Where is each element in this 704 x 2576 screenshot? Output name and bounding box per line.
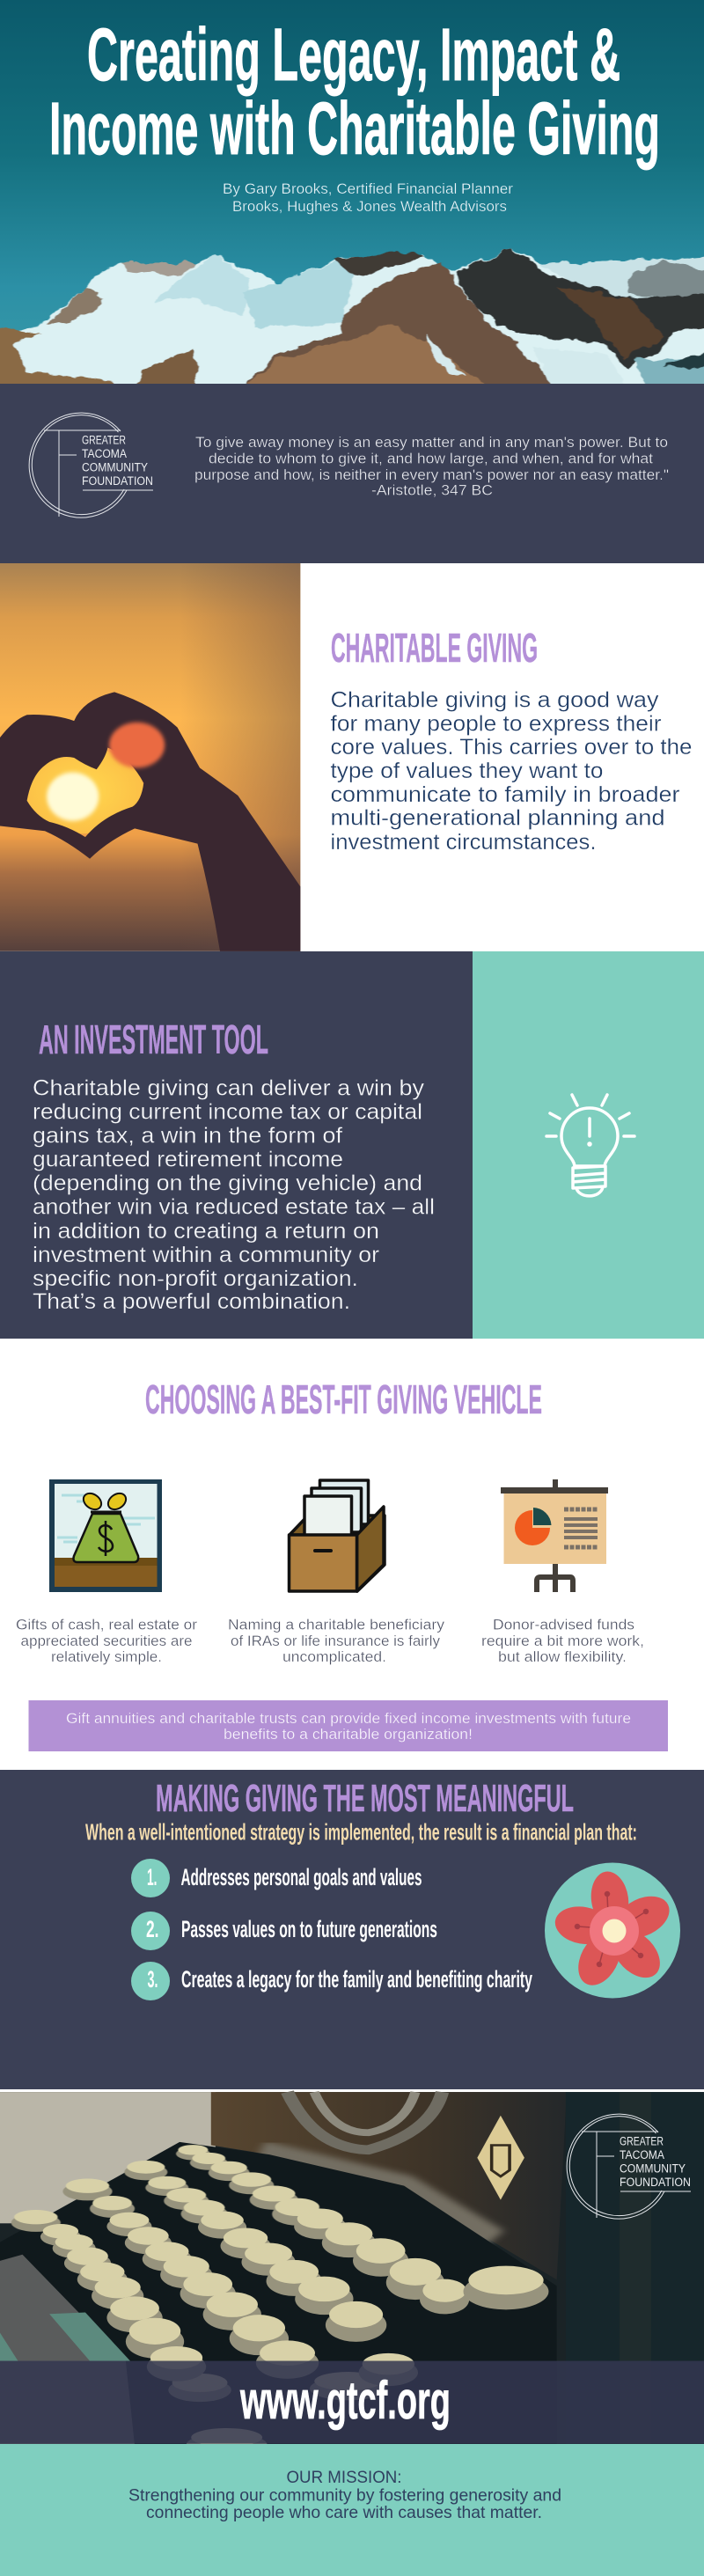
body text: (depending on the giving vehicle) and	[33, 1171, 422, 1195]
caption: donor-advised funds: Donor-advised funds	[493, 1616, 634, 1633]
body text: multi-generational planning and	[331, 806, 665, 831]
body text: Charitable giving can deliver a win by	[33, 1075, 425, 1100]
caption: beneficiary	[228, 1616, 445, 1665]
callout: gift annuities: benefits to a charitable organization!	[224, 1726, 473, 1743]
Aristotle quote: decide to whom to give it, and how large, and when, and for what	[209, 451, 653, 466]
byline	[223, 180, 513, 215]
caption: beneficiary: uncomplicated.	[282, 1648, 386, 1665]
list item 1: 1.	[147, 1864, 157, 1890]
panel: charitable giving	[0, 563, 704, 951]
logo: Greater Tacoma Community Foundation: FOUNDATION	[82, 474, 153, 488]
heading: AN INVESTMENT TOOL	[39, 1016, 268, 1062]
mission text: Strengthening our community by fostering generosity and	[128, 2485, 561, 2505]
list item 1: Addresses personal goals and values	[181, 1864, 422, 1890]
panel: quote band	[0, 384, 704, 563]
caption: gifts: appreciated securities are	[21, 1633, 192, 1649]
photo: heart hands at sunset	[0, 563, 300, 951]
mission text: OUR MISSION:	[287, 2468, 401, 2487]
body text: guaranteed retirement income	[33, 1148, 343, 1172]
byline: By Gary Brooks, Certified Financial Planner	[223, 180, 513, 197]
icon: presentation board	[501, 1479, 608, 1592]
logo: Greater Tacoma Community Foundation: FOUNDATION	[620, 2176, 691, 2189]
body text: specific non-profit organization.	[33, 1266, 358, 1291]
logo: Greater Tacoma Community Foundation: COMMUNITY	[620, 2161, 686, 2176]
caption: donor-advised funds	[481, 1616, 644, 1665]
body text: in addition to creating a return on	[33, 1219, 379, 1244]
divider line	[0, 2089, 704, 2092]
Aristotle quote: -Aristotle, 347 BC	[371, 482, 493, 498]
caption: donor-advised funds: but allow flexibility.	[498, 1648, 627, 1665]
caption: beneficiary: Naming a charitable beneficiary	[228, 1616, 445, 1633]
body text: reducing current income tax or capital	[33, 1100, 422, 1125]
Aristotle quote	[194, 434, 669, 498]
body text: another win via reduced estate tax – all	[33, 1195, 435, 1220]
list item 3: 3.	[148, 1966, 158, 1993]
Aristotle quote: To give away money is an easy matter and in any man's power. But to	[195, 434, 668, 451]
body text: investment circumstances.	[331, 830, 597, 855]
panel: choosing a best-fit giving vehicle	[0, 1339, 704, 1770]
panel: an investment tool	[0, 951, 704, 1339]
icon: light bulb	[546, 1095, 634, 1196]
logo: Greater Tacoma Community Foundation: GREATER	[82, 433, 126, 447]
list item 3	[131, 1962, 532, 2000]
panel: our mission footer	[0, 2444, 704, 2576]
body text: That’s a powerful combination.	[33, 1289, 350, 1314]
caption: beneficiary: of IRAs or life insurance is fairly	[231, 1633, 440, 1649]
body text	[33, 1075, 435, 1314]
logo: Greater Tacoma Community Foundation: TACOMA	[620, 2148, 664, 2161]
caption: gifts	[16, 1616, 197, 1665]
byline: Brooks, Hughes & Jones Wealth Advisors	[232, 198, 507, 215]
body text: Charitable giving is a good way	[331, 688, 659, 713]
body text: communicate to family in broader	[331, 782, 679, 807]
mountain range photo	[0, 248, 704, 395]
list item 2: 2.	[146, 1916, 158, 1942]
mission text	[128, 2468, 561, 2522]
icon: box of files	[289, 1480, 385, 1591]
caption: gifts: relatively simple.	[51, 1648, 162, 1665]
logo: Greater Tacoma Community Foundation	[29, 413, 153, 517]
body text: type of values they want to	[331, 759, 604, 783]
icon: money bag	[49, 1479, 162, 1592]
body text: core values. This carries over to the	[331, 735, 692, 760]
body text: gains tax, a win in the form of	[33, 1123, 342, 1148]
mission text: connecting people who care with causes that matter.	[146, 2503, 542, 2522]
list item 2: Passes values on to future generations	[181, 1916, 437, 1942]
Aristotle quote: purpose and how, is neither in every man's power nor an easy matter."	[194, 466, 669, 483]
title	[49, 13, 660, 170]
callout: gift annuities	[28, 1700, 668, 1751]
logo: Greater Tacoma Community Foundation	[567, 2114, 691, 2219]
photo: typewriter keys	[0, 2092, 704, 2456]
callout: gift annuities: Gift annuities and charitable trusts can provide fixed income investments with future	[66, 1710, 631, 1727]
body text	[331, 688, 692, 855]
logo: Greater Tacoma Community Foundation: GREATER	[620, 2135, 664, 2147]
website url: www.gtcf.org	[239, 2371, 451, 2430]
panel: header with mountain photo	[0, 0, 704, 395]
list item 1	[131, 1859, 422, 1897]
caption: donor-advised funds: require a bit more work,	[481, 1633, 644, 1649]
caption: gifts: Gifts of cash, real estate or	[16, 1616, 197, 1633]
body text: for many people to express their	[331, 711, 662, 736]
panel: making giving the most meaningful	[0, 1770, 704, 2089]
logo: Greater Tacoma Community Foundation: COMMUNITY	[82, 461, 148, 473]
logo: Greater Tacoma Community Foundation: TACOMA	[82, 447, 127, 460]
list item 2	[131, 1912, 437, 1950]
icon: flower	[545, 1862, 680, 1998]
panel: typewriter photo	[0, 2092, 704, 2456]
translucent band	[0, 2361, 704, 2444]
body text: investment within a community or	[33, 1243, 379, 1267]
